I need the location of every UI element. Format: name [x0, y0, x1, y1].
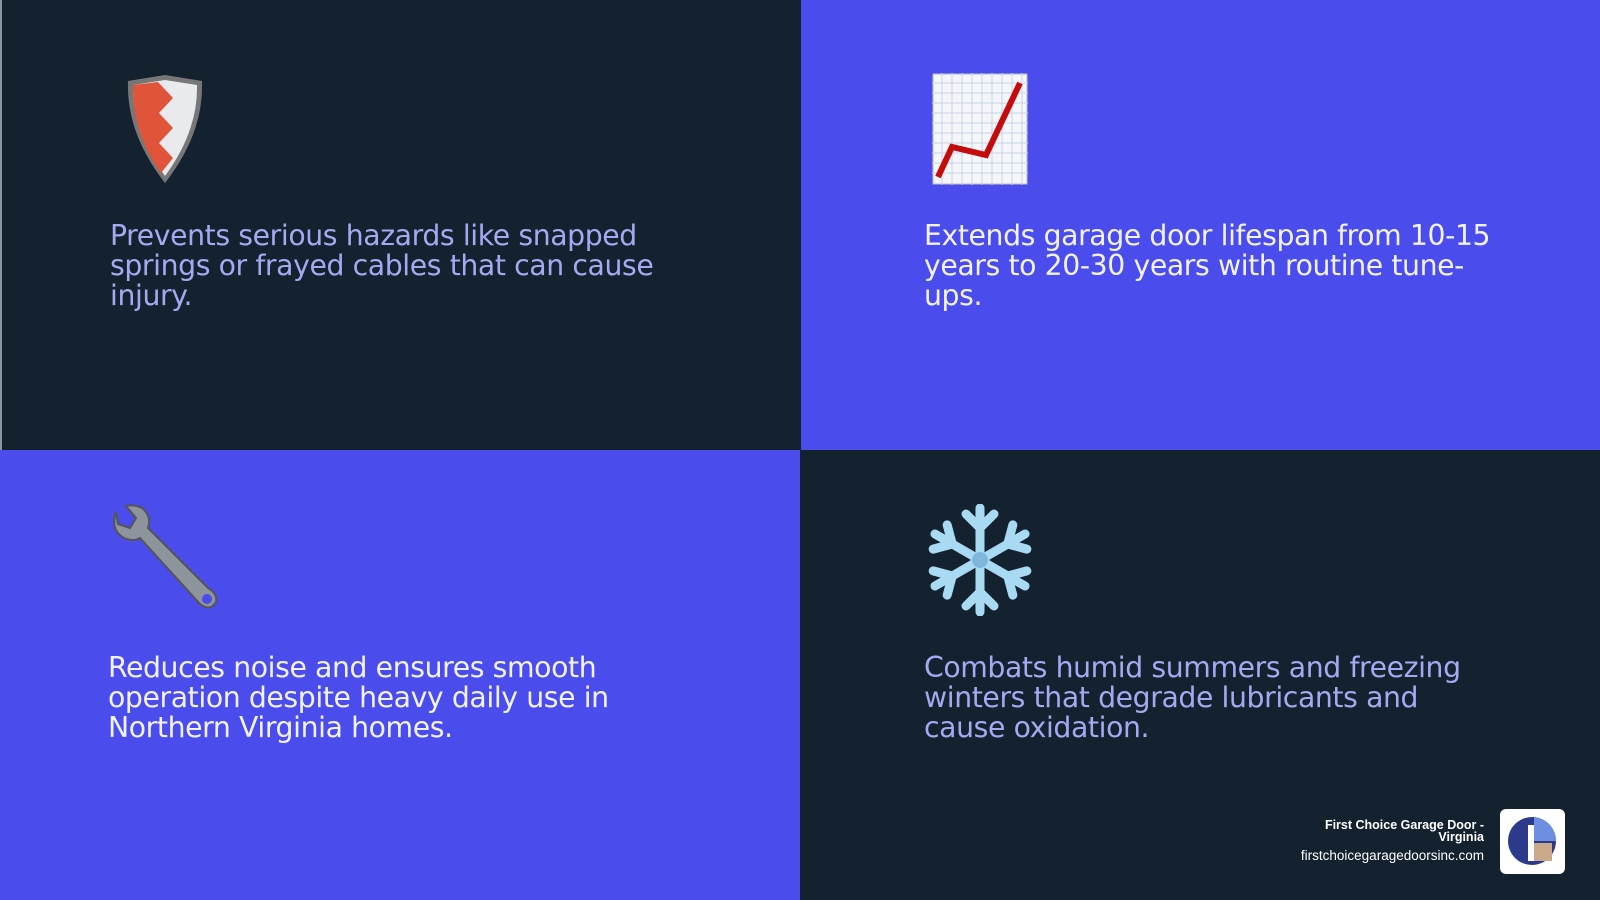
footer: company info: firstchoicegaragedoorsinc.com	[1301, 848, 1484, 863]
footer: company info	[1301, 818, 1484, 863]
icon: chart	[932, 73, 1028, 185]
text: lifespan: Extends garage door lifespan from 10-15 years to 20-30 years with routine tune-ups.	[924, 219, 1490, 312]
panel: noise	[0, 450, 800, 900]
icon: snowflake	[928, 504, 1032, 616]
footer: company info: Virginia	[1438, 830, 1484, 844]
panel: climate	[801, 450, 1600, 900]
text: noise: Reduces noise and ensures smooth operation despite heavy daily use in Northern Virginia homes.	[108, 651, 609, 744]
footer: company info: First Choice Garage Door -	[1325, 818, 1484, 832]
logo	[1500, 809, 1565, 874]
panel: safety	[0, 0, 800, 450]
icon: shield	[128, 75, 202, 183]
text: climate: Combats humid summers and freezing winters that degrade lubricants and cause oxidation.	[924, 651, 1461, 744]
panel: lifespan	[801, 0, 1600, 450]
icon: wrench	[113, 504, 218, 608]
text: safety: Prevents serious hazards like snapped springs or frayed cables that can cause injury.	[110, 219, 653, 312]
